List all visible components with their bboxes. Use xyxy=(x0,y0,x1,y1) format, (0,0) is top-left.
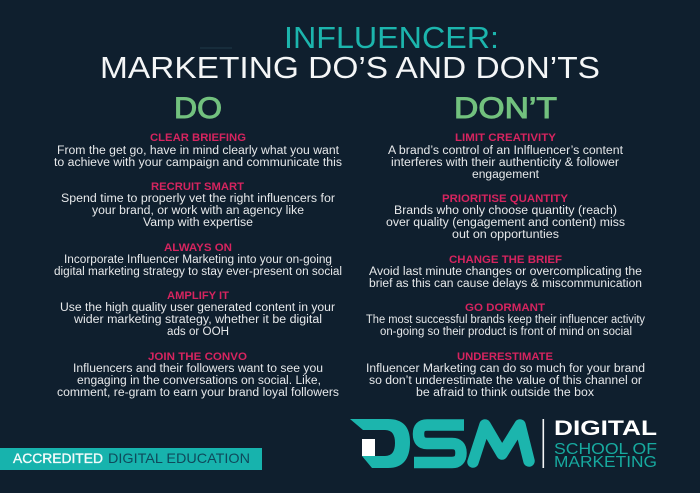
tip: underestimate: Influencer Marketing can do so much for your brand xyxy=(366,363,645,375)
tip: go dormant: The most successful brands keep their influencer activity xyxy=(366,314,645,326)
tip: underestimate: UNDERESTIMATE xyxy=(457,351,553,363)
tip: recruit smart: RECRUIT SMART xyxy=(151,181,244,193)
tip: go dormant: GO DORMANT xyxy=(465,302,545,314)
tip: amplify it: AMPLIFY IT xyxy=(167,290,229,302)
tip: join the convo xyxy=(57,351,339,399)
tip: go dormant: on-going so their product is front of mind on social xyxy=(380,326,632,338)
tip: change the brief: brief as this can cause delays & miscommunication xyxy=(369,278,642,290)
tip: underestimate xyxy=(366,351,645,399)
tip: recruit smart: Vamp with expertise xyxy=(143,217,253,229)
tip: amplify it xyxy=(60,290,335,338)
tip: go dormant xyxy=(366,302,645,338)
heading: do: DO xyxy=(174,92,222,125)
tip: amplify it: ads or OOH xyxy=(167,326,229,338)
tip: change the brief xyxy=(369,254,642,290)
tip: change the brief: CHANGE THE BRIEF xyxy=(449,254,562,266)
tip: always on: Incorporate Influencer Marketing into your on-going xyxy=(64,254,332,266)
tip: underestimate: be afraid to think outside the box xyxy=(416,387,594,399)
tip: join the convo: JOIN THE CONVO xyxy=(148,351,247,363)
tip: recruit smart: your brand, or work with an agency like xyxy=(92,205,304,217)
logo wordmark: MARKETING xyxy=(554,454,657,471)
tip: always on xyxy=(54,242,342,278)
tip: limit creativity: A brand’s control of an Inlfluencer’s content xyxy=(388,145,624,157)
tip: amplify it: wider marketing strategy, whether it be digital xyxy=(73,314,322,326)
logo: digital school of marketing xyxy=(350,417,657,471)
tip: prioritise quantity: PRIORITISE QUANTITY xyxy=(442,193,569,205)
tip: prioritise quantity: Brands who only choose quantity (reach) xyxy=(394,205,617,217)
tip: join the convo: comment, re-gram to earn your brand loyal followers xyxy=(57,387,339,399)
tip: clear briefing: to achieve with your campaign and communicate this xyxy=(54,157,342,169)
tip: prioritise quantity xyxy=(386,193,625,241)
title: INFLUENCER: xyxy=(284,20,499,55)
tip: limit creativity: engagement xyxy=(472,169,540,181)
panel: don't xyxy=(366,92,645,399)
tip: clear briefing: CLEAR BRIEFING xyxy=(150,132,246,144)
banner: accredited digital education: DIGITAL EDUCATION xyxy=(108,450,250,466)
tip: recruit smart xyxy=(61,181,335,229)
logo wordmark: SCHOOL OF xyxy=(554,441,657,458)
tip: limit creativity: interferes with their authenticity & follower xyxy=(391,157,619,169)
tip: amplify it: Use the high quality user generated content in your xyxy=(60,302,335,314)
tip: recruit smart: Spend time to properly vet the right influencers for xyxy=(61,193,335,205)
logo wordmark xyxy=(554,417,657,471)
tip: join the convo: Influencers and their followers want to see you xyxy=(73,363,323,375)
tip: join the convo: engaging in the conversations on social. Like, xyxy=(77,375,321,387)
panel: do xyxy=(54,92,342,399)
tip: limit creativity xyxy=(388,132,624,181)
tip: change the brief: Avoid last minute changes or overcomplicating the xyxy=(369,266,642,278)
tip: always on: ALWAYS ON xyxy=(164,242,232,254)
tip: always on: digital marketing strategy to stay ever-present on social xyxy=(54,266,342,278)
tip: prioritise quantity: over quality (engagement and content) miss xyxy=(386,217,625,229)
banner: accredited digital education: ACCREDITED xyxy=(13,450,103,466)
logo wordmark: DIGITAL xyxy=(554,417,657,440)
tip: prioritise quantity: out on opportunties xyxy=(452,229,559,241)
banner: accredited digital education xyxy=(0,448,262,470)
tip: clear briefing xyxy=(54,132,342,169)
title: MARKETING DO’S AND DON’TS xyxy=(100,50,600,85)
tip: underestimate: so don’t underestimate the value of this channel or xyxy=(369,375,642,387)
title xyxy=(100,20,600,85)
icon: DSM letters xyxy=(350,419,529,468)
heading: don't: DON’T xyxy=(454,92,557,125)
tip: limit creativity: LIMIT CREATIVITY xyxy=(455,132,557,144)
tip: clear briefing: From the get go, have in mind clearly what you want xyxy=(57,145,340,157)
